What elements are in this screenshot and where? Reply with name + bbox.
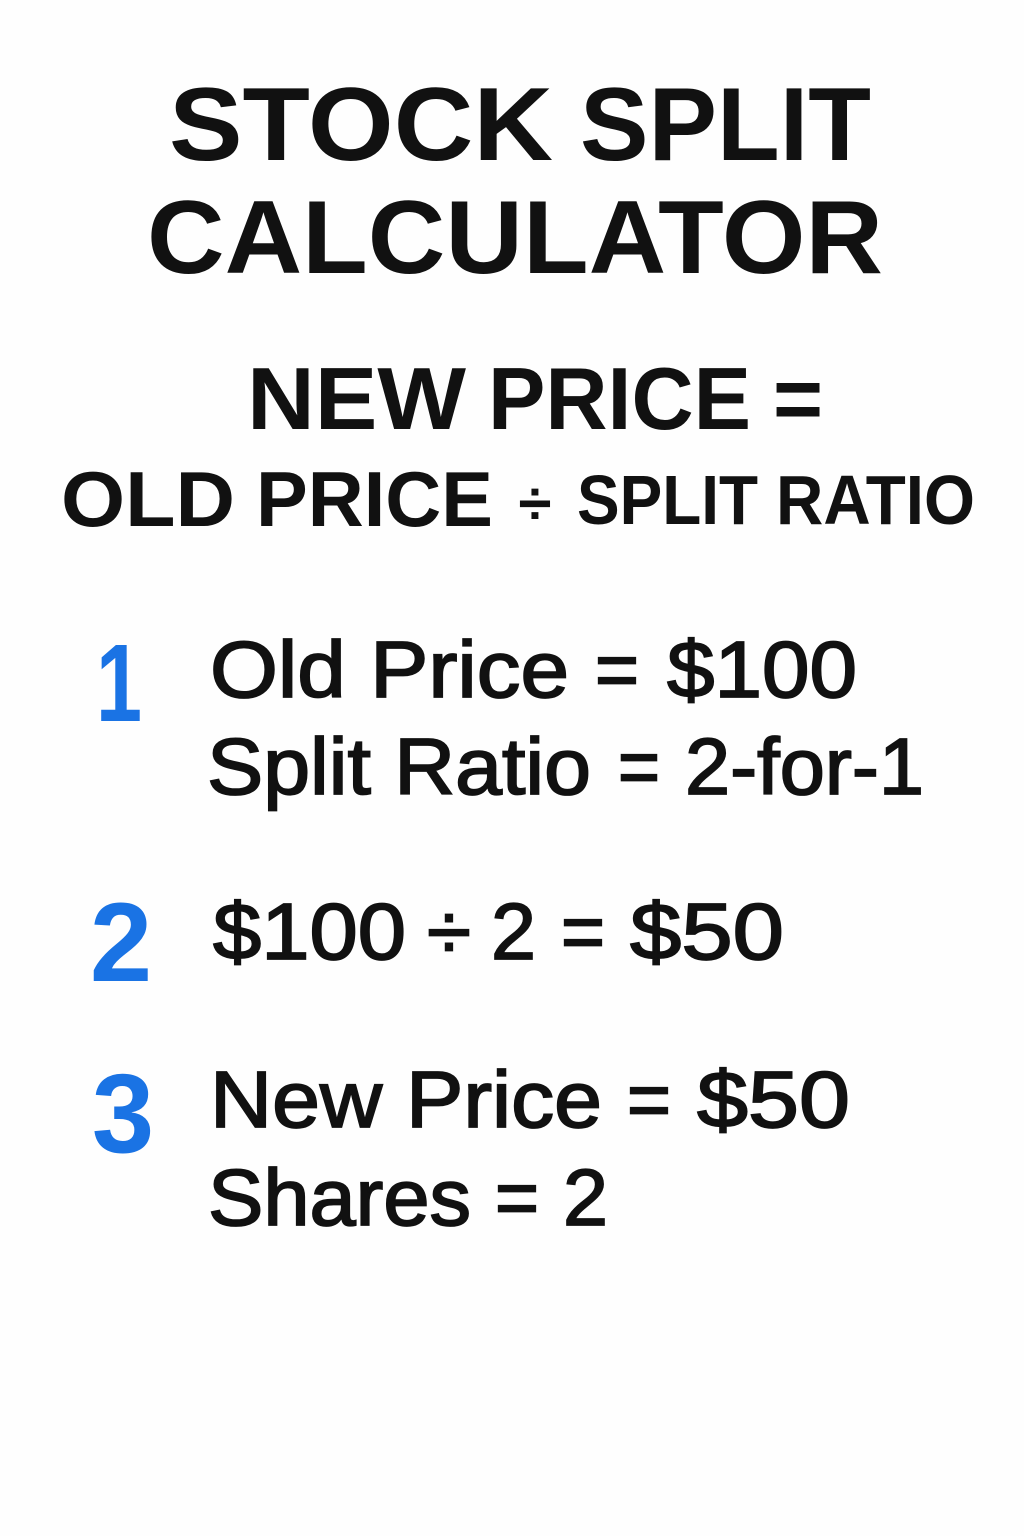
step 3 number: 3 (92, 1051, 154, 1176)
step 1 text: Split Ratio (207, 722, 591, 811)
step 3 text: $50 (697, 1055, 850, 1144)
formula (61, 349, 975, 543)
step 3 text: Shares (208, 1153, 471, 1242)
formula: PRICE (488, 349, 751, 448)
step 1 number: 1 (96, 622, 142, 745)
formula: = (773, 349, 823, 448)
step 3 text: = (495, 1153, 539, 1242)
formula: ÷ (519, 470, 551, 537)
formula: SPLIT (577, 461, 758, 539)
formula: NEW (247, 349, 466, 448)
step 3 text: New Price (210, 1055, 602, 1144)
step 3 text (208, 1055, 850, 1242)
step 2 text: 2 (491, 887, 536, 976)
title: STOCK (169, 67, 553, 183)
formula: OLD (61, 455, 235, 543)
title (147, 67, 883, 296)
step 2 text: $50 (630, 887, 784, 976)
step 2 text (213, 887, 784, 976)
step 2 number: 2 (90, 880, 152, 1005)
step 3 text: 2 (563, 1153, 608, 1242)
step 3 text: = (627, 1055, 671, 1144)
step 1 text: 2-for-1 (685, 722, 924, 811)
step 3 (92, 1051, 850, 1242)
step 1 text: = (595, 625, 639, 714)
step 2 text: = (561, 887, 605, 976)
step 1 text: $100 (667, 625, 857, 714)
formula: PRICE (256, 455, 493, 543)
step 1 text: = (618, 722, 660, 811)
step 1 text: Old Price (210, 625, 569, 714)
step 1 text (207, 625, 924, 811)
title: SPLIT (580, 67, 871, 183)
step 2 (90, 880, 784, 1005)
formula: RATIO (776, 461, 975, 539)
step 1 (96, 622, 924, 811)
title: CALCULATOR (147, 180, 883, 296)
step 2 text: ÷ (427, 887, 471, 976)
step 2 text: $100 (213, 887, 406, 976)
